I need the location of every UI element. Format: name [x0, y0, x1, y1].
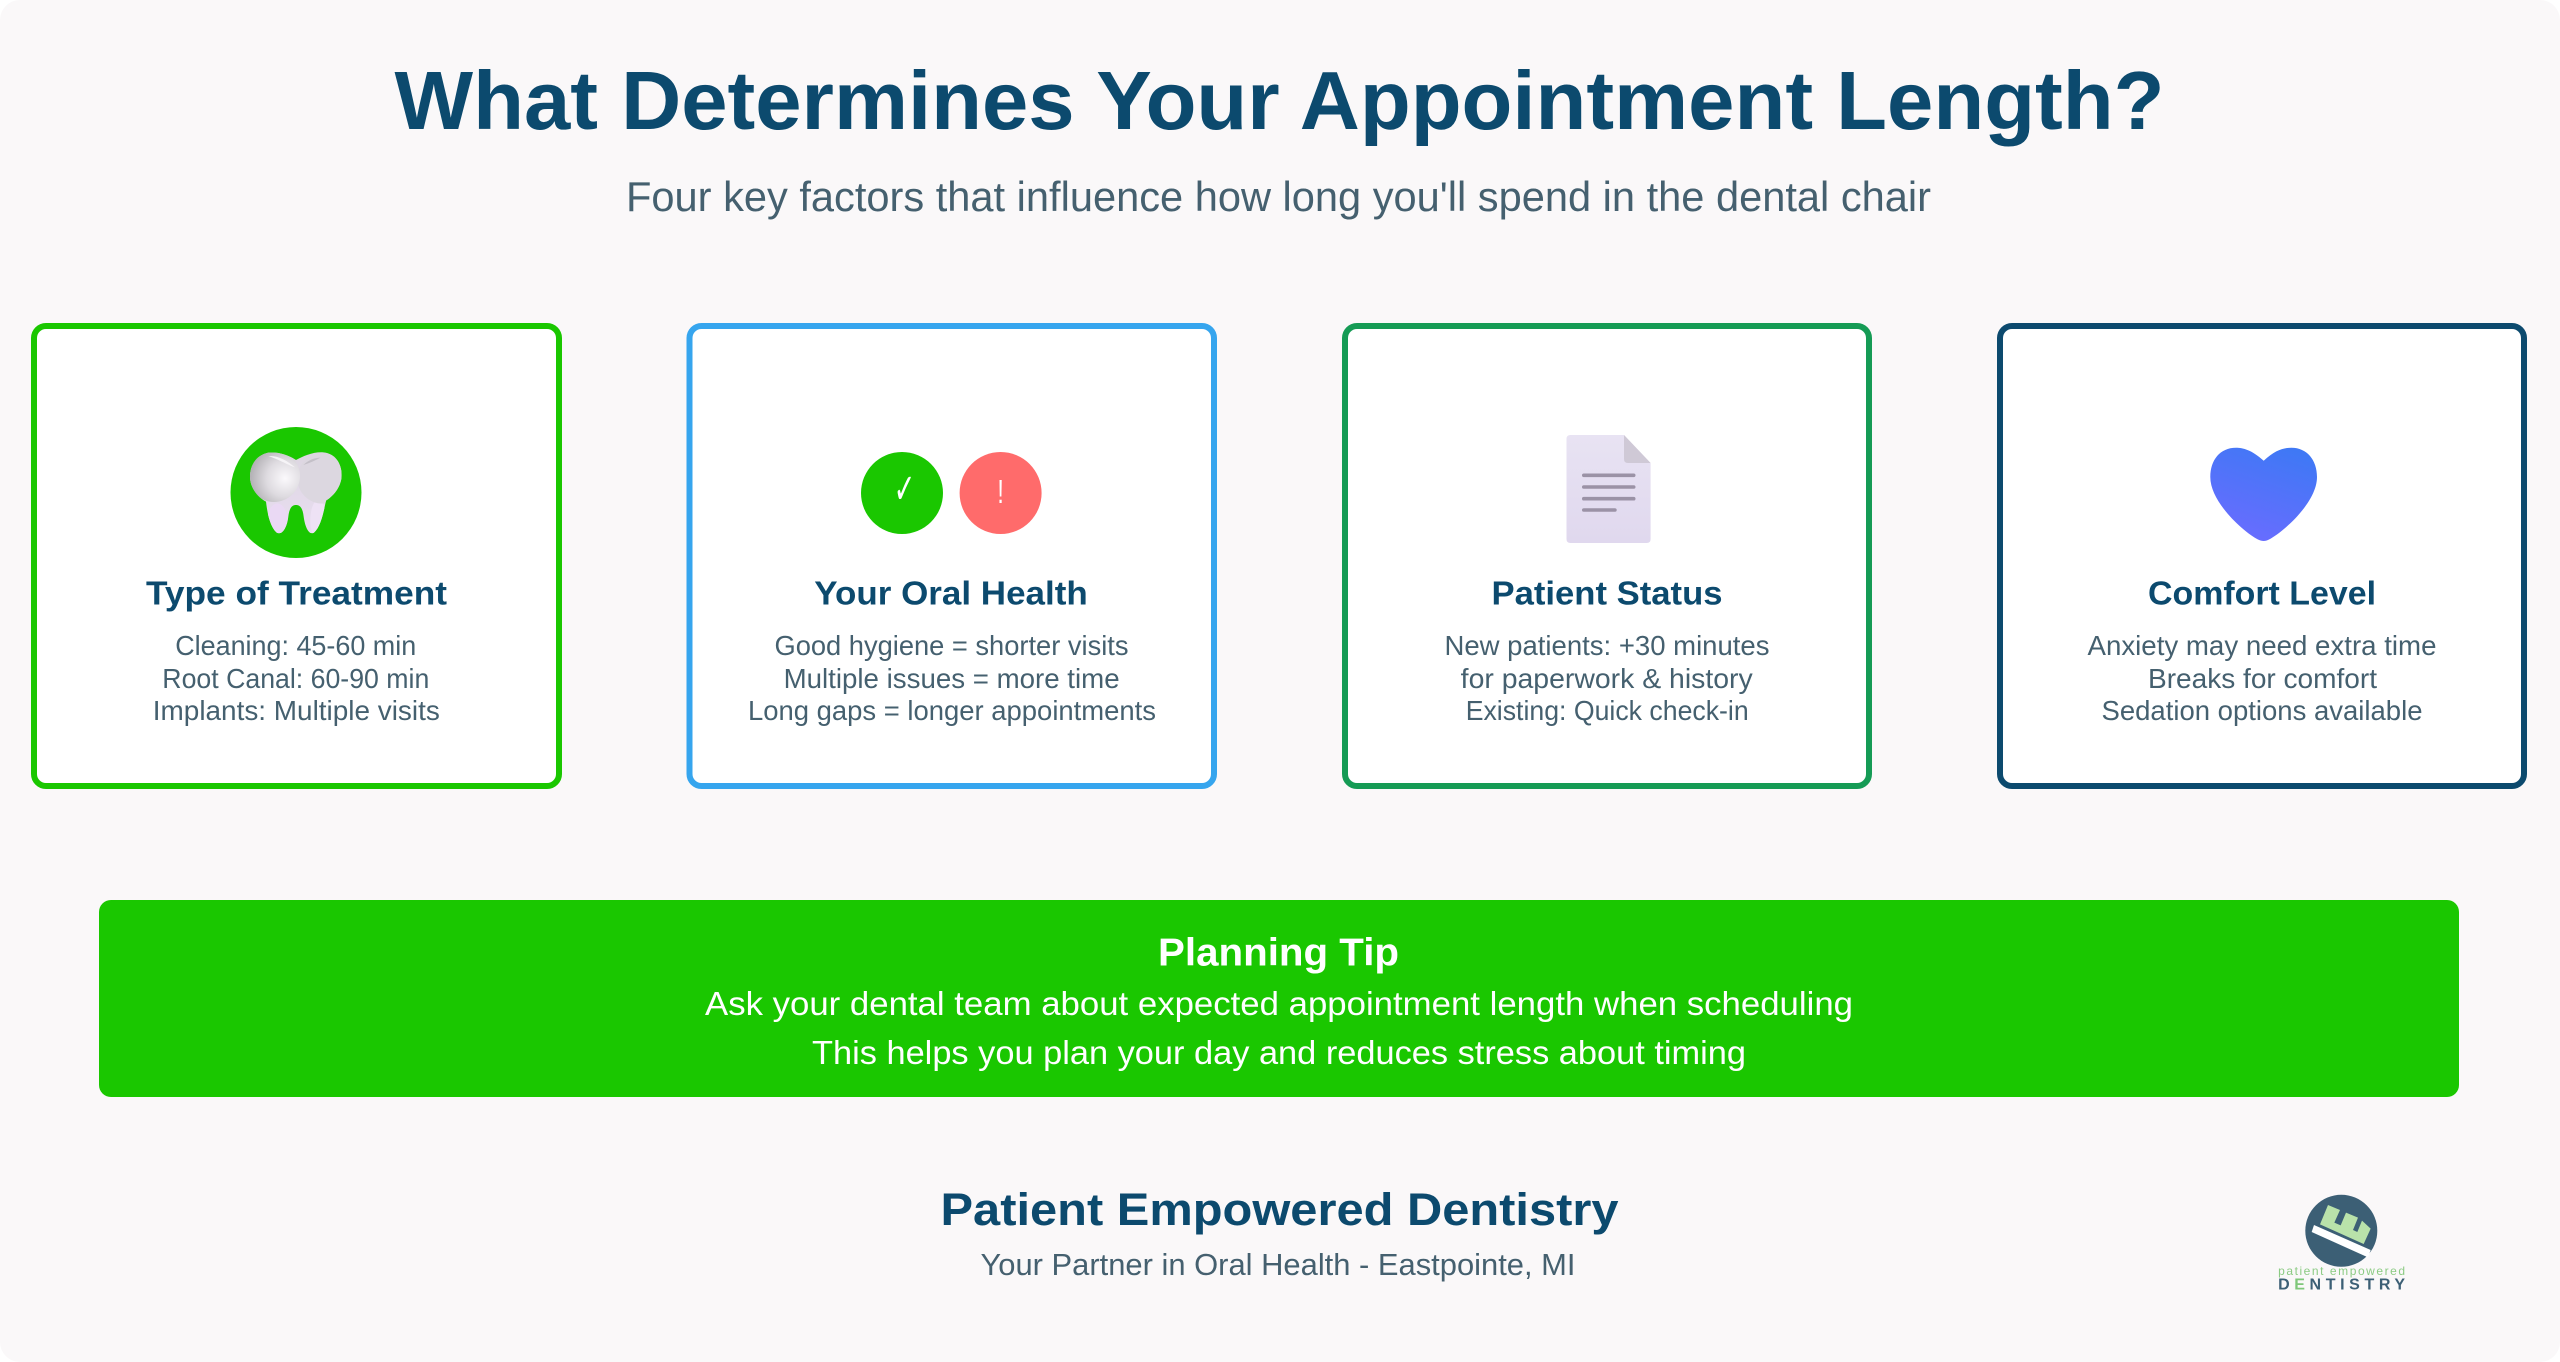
card text: New patients: +30 minutes: [1444, 630, 1770, 661]
card text: for paperwork & history: [1461, 663, 1753, 694]
card text: [2088, 630, 2436, 726]
card text: [748, 630, 1156, 726]
card text: [1444, 630, 1770, 726]
card text: Anxiety may need extra time: [2088, 630, 2436, 661]
card text: Good hygiene = shorter visits: [774, 630, 1128, 661]
card frame: [1345, 326, 1869, 786]
panel: type of treatment: [34, 326, 559, 786]
card text: Sedation options available: [2102, 695, 2422, 726]
icon: tooth in green circle: [230, 427, 362, 558]
panel: comfort level: [2000, 326, 2524, 786]
panel: your oral health: [690, 326, 1214, 786]
logo: [2278, 1195, 2405, 1294]
callout background: [99, 900, 2459, 1097]
callout: planning tip: [99, 900, 2459, 1097]
footer tagline: Your Partner in Oral Health - Eastpointe, MI: [980, 1247, 1576, 1282]
callout line 2: This helps you plan your day and reduces stress about timing: [812, 1035, 1746, 1072]
icon: alert badge: !: [997, 474, 1004, 511]
logo: patient empowered: [2278, 1264, 2405, 1278]
icon: check badge: [861, 452, 943, 534]
card text: [153, 630, 440, 726]
callout heading: Planning Tip: [1158, 932, 1399, 974]
card heading: Type of Treatment: [146, 574, 447, 612]
callout line 1: Ask your dental team about expected appointment length when scheduling: [705, 986, 1853, 1023]
title: What Determines Your Appointment Length?: [394, 54, 2164, 147]
icon: heart: [2210, 448, 2317, 541]
card frame: [34, 326, 559, 786]
subtitle: Four key factors that influence how long you'll spend in the dental chair: [626, 173, 1931, 220]
icon: check badge: ✓: [894, 466, 915, 514]
card text: Long gaps = longer appointments: [748, 695, 1156, 726]
logo: D E NTISTRY: [2278, 1276, 2405, 1294]
footer brand name: Patient Empowered Dentistry: [940, 1184, 1619, 1235]
card text: Root Canal: 60-90 min: [162, 663, 429, 694]
card heading: Comfort Level: [2148, 574, 2376, 612]
card text: Implants: Multiple visits: [153, 695, 440, 726]
card heading: Patient Status: [1492, 574, 1722, 612]
icon: alert badge: [960, 452, 1042, 534]
card text: Multiple issues = more time: [784, 663, 1120, 694]
panel: patient status: [1345, 326, 1869, 786]
card text: Cleaning: 45-60 min: [175, 630, 416, 661]
card frame: [690, 326, 1214, 786]
card heading: Your Oral Health: [814, 574, 1088, 612]
card text: Existing: Quick check-in: [1466, 695, 1749, 726]
card text: Breaks for comfort: [2148, 663, 2377, 694]
card frame: [2000, 326, 2524, 786]
icon: document: [1566, 435, 1651, 543]
